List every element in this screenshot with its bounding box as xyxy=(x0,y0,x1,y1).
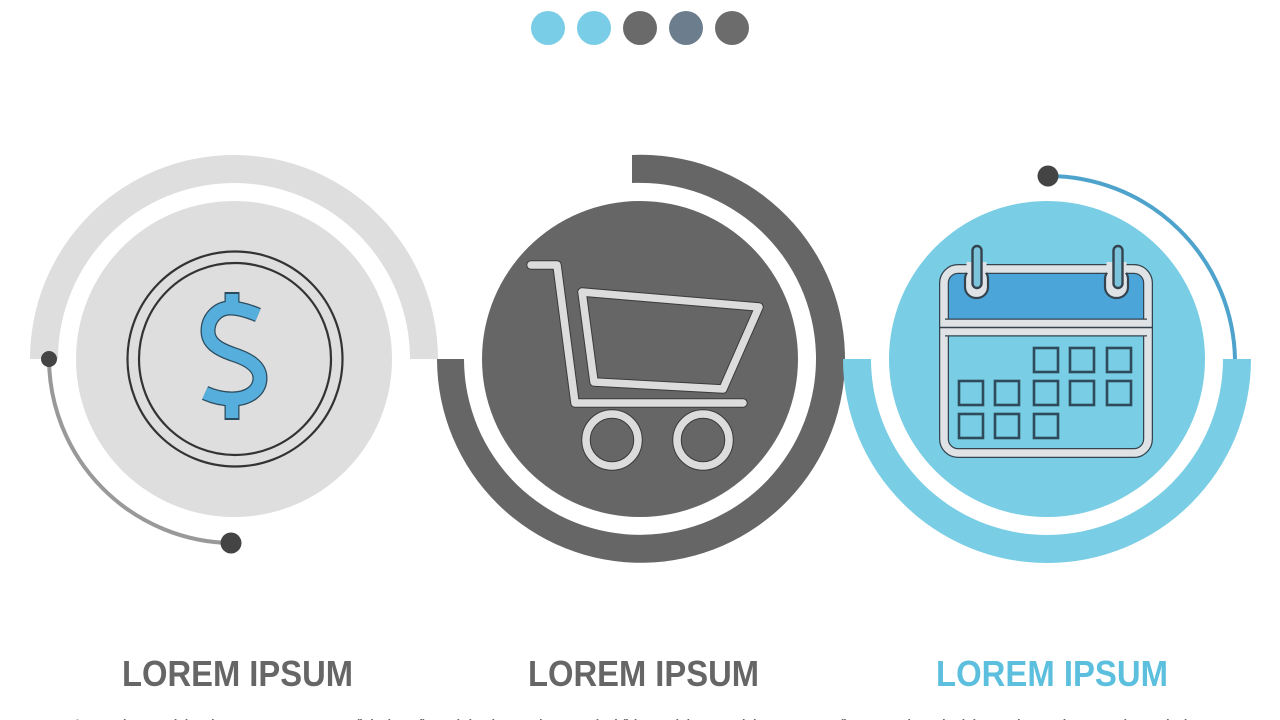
panel: money xyxy=(30,155,438,554)
panel: calendar xyxy=(843,166,1251,563)
heading: column 3: LOREM IPSUM xyxy=(936,653,1168,694)
disc: money xyxy=(76,201,392,517)
icon: shopping cart xyxy=(531,265,759,466)
disc: shopping xyxy=(482,201,798,517)
thin arc with end dot: calendar xyxy=(1038,166,1235,359)
date grid xyxy=(959,348,1131,438)
heading: column 1: LOREM IPSUM xyxy=(122,653,353,694)
heading: column 2: LOREM IPSUM xyxy=(528,653,759,694)
thin arc with end dots: money xyxy=(41,351,242,554)
icon: dollar coin xyxy=(128,252,342,466)
outer half ring: calendar xyxy=(843,359,1251,563)
disc: calendar xyxy=(889,201,1205,517)
icon: calendar xyxy=(940,246,1152,453)
panel: shopping xyxy=(437,155,845,563)
pagination dots xyxy=(531,11,749,45)
outer half ring: money xyxy=(30,155,438,359)
outer ring: shopping xyxy=(437,155,845,563)
